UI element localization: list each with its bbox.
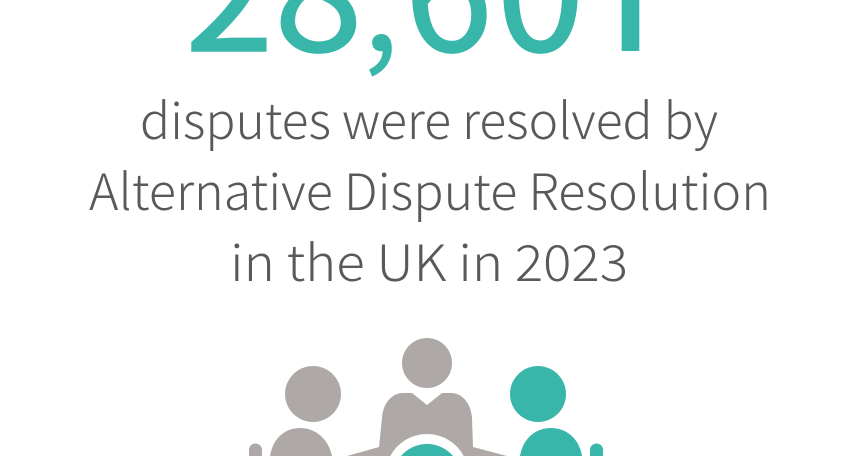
person: centre xyxy=(347,338,507,456)
icon: people around a table xyxy=(249,338,603,456)
line 3: in the UK in 2023 xyxy=(230,224,628,296)
big number xyxy=(191,0,640,77)
table centre circle xyxy=(390,434,464,456)
person: left xyxy=(249,366,341,456)
infographic xyxy=(89,0,766,456)
line 2: Alternative Dispute Resolution xyxy=(89,153,771,225)
description text xyxy=(89,82,771,296)
person: right xyxy=(510,366,603,456)
line 1: disputes were resolved by xyxy=(140,82,718,154)
